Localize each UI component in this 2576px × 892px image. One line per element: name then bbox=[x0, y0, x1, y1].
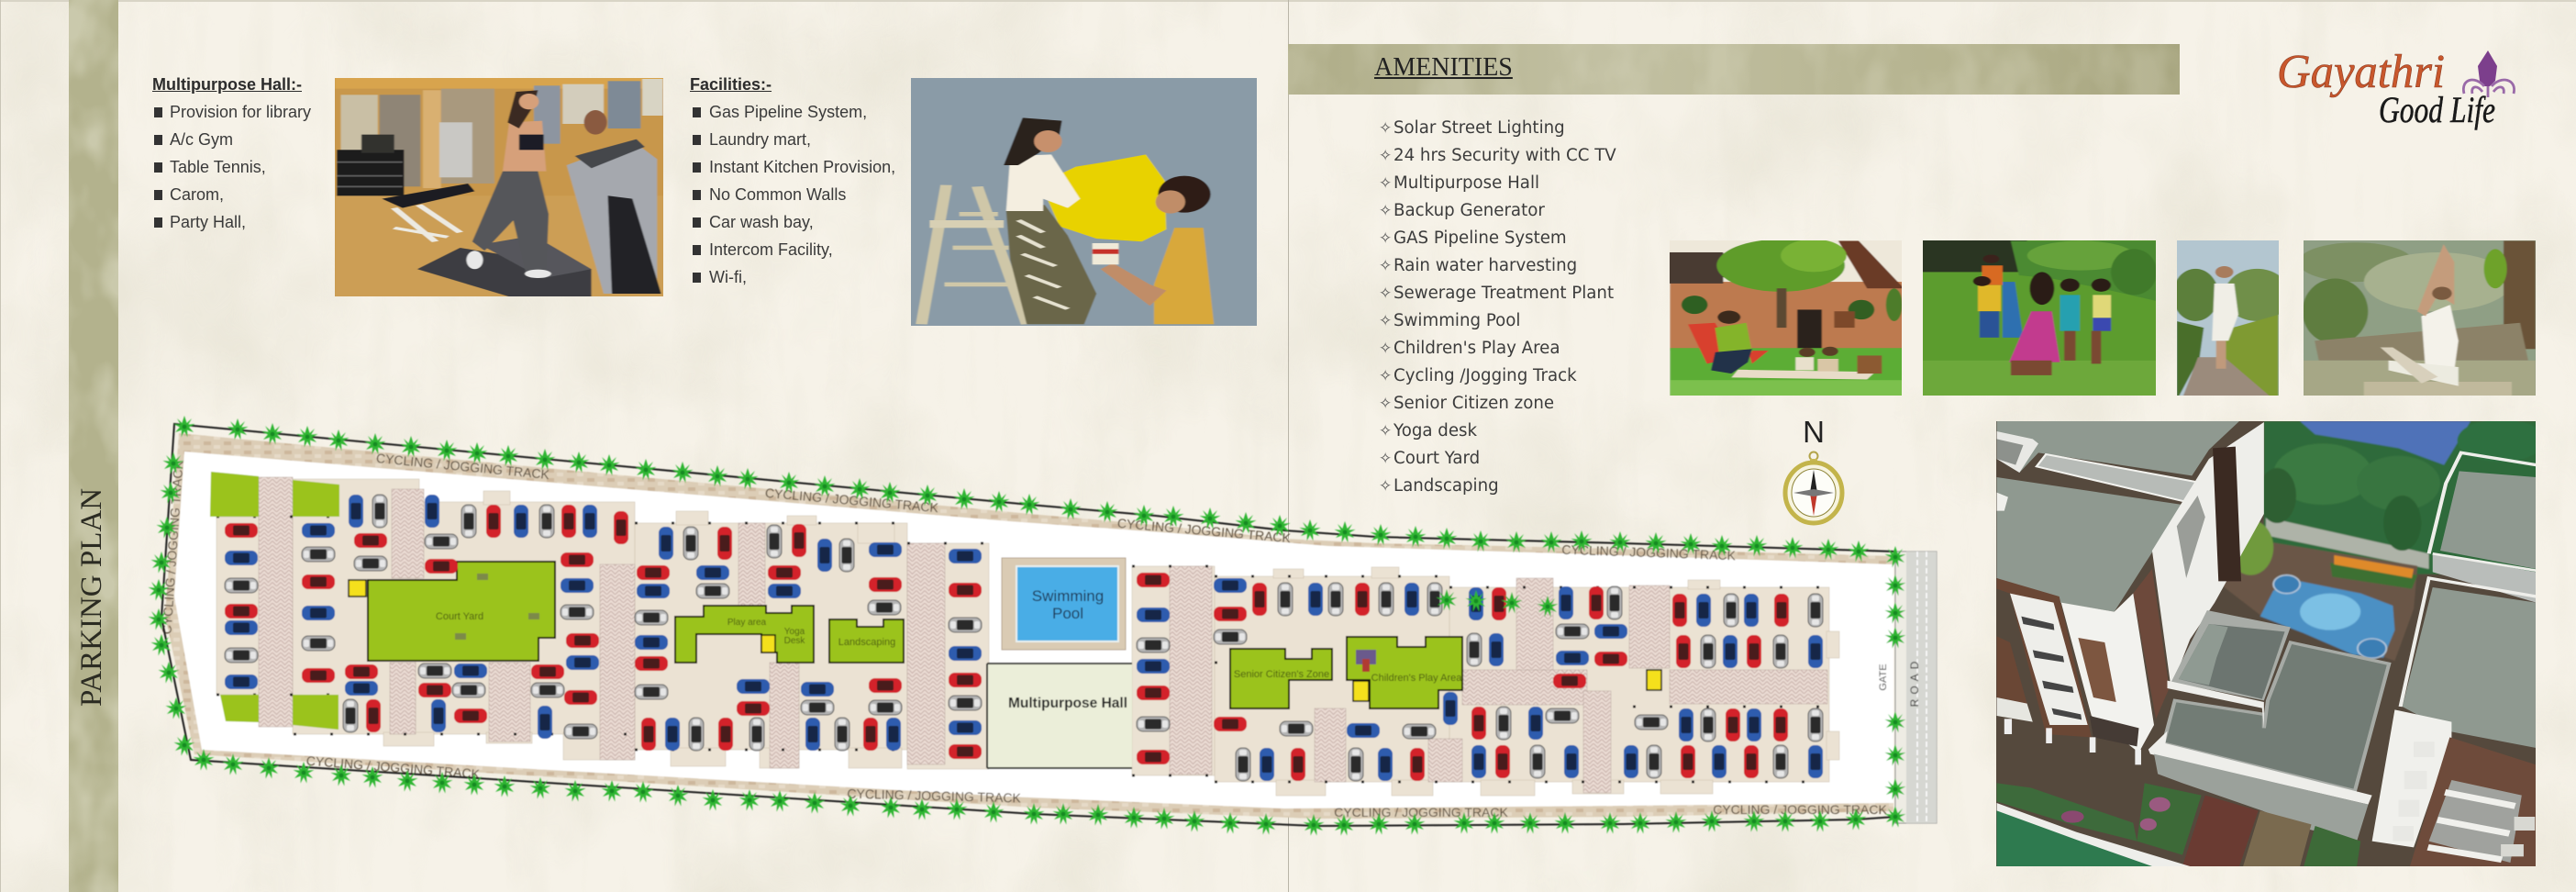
3D aerial render of the buildings and pool bbox=[1996, 421, 2536, 866]
list of amenities: Yoga desk bbox=[1393, 421, 1477, 440]
heading: parking plan: PARKING PLAN bbox=[75, 488, 108, 707]
list of amenities: ✧ bbox=[1379, 147, 1392, 165]
heading: multipurpose hall: Multipurpose Hall:- bbox=[152, 75, 302, 94]
gate label: GATE bbox=[1878, 663, 1889, 691]
olive side strip bbox=[69, 0, 118, 892]
list of facilities: Laundry mart, bbox=[709, 130, 811, 149]
list of facilities: Car wash bay, bbox=[709, 213, 814, 231]
list of facilities: Wi-fi, bbox=[709, 268, 747, 286]
track labels: CYCLING / JOGGING TRACK bbox=[305, 753, 481, 781]
photo: gym with woman on treadmill bbox=[335, 78, 663, 296]
swimming pool: Pool bbox=[1052, 605, 1083, 622]
list of amenities: GAS Pipeline System bbox=[1393, 229, 1567, 248]
list of amenities: ✧ bbox=[1379, 174, 1392, 193]
landscaping: Landscaping bbox=[838, 637, 895, 648]
list of amenities: Senior Citizen zone bbox=[1393, 394, 1554, 413]
track labels: CYCLING / JOGGING TRACK bbox=[1334, 805, 1508, 820]
track labels bbox=[159, 451, 1887, 820]
corner landscape lawns bbox=[210, 472, 339, 730]
jogging track band bbox=[165, 433, 1893, 819]
lift: court yard bbox=[349, 580, 366, 597]
heading: facilities: Facilities:- bbox=[690, 75, 772, 94]
list of amenities: Landscaping bbox=[1393, 476, 1499, 496]
list of amenities: Children's Play Area bbox=[1393, 339, 1560, 358]
list of amenities: ✧ bbox=[1379, 340, 1392, 358]
road and gate bbox=[1878, 552, 1937, 823]
structural pillars bbox=[217, 517, 1829, 782]
list of amenities: ✧ bbox=[1379, 284, 1392, 303]
list of hall features: Provision for library bbox=[170, 103, 311, 121]
panel: multipurpose hall list bbox=[152, 75, 311, 231]
track labels: CYCLING / JOGGING TRACK bbox=[764, 485, 939, 515]
list of amenities: Rain water harvesting bbox=[1393, 256, 1577, 275]
list of amenities: ✧ bbox=[1379, 395, 1392, 413]
title: amenities: AMENITIES bbox=[1374, 53, 1513, 82]
list of amenities: ✧ bbox=[1379, 229, 1392, 248]
play area and yoga desk: Play area bbox=[727, 618, 767, 628]
centre block bbox=[2163, 642, 2389, 791]
multipurpose hall: Multipurpose Hall bbox=[1008, 696, 1127, 711]
photo: woman doing yoga bbox=[2304, 240, 2536, 396]
swimming pool bbox=[1002, 558, 1126, 650]
white site interior bbox=[174, 452, 1893, 808]
list of hall features: Party Hall, bbox=[170, 213, 246, 231]
list of amenities: 24 hrs Security with CC TV bbox=[1393, 146, 1616, 165]
play area and yoga desk bbox=[675, 606, 814, 663]
right block bbox=[2440, 471, 2537, 569]
photo: woman jogging on path bbox=[2177, 240, 2279, 396]
list of amenities: ✧ bbox=[1379, 422, 1392, 440]
list of amenities: Sewerage Treatment Plant bbox=[1393, 284, 1614, 303]
list of amenities: ✧ bbox=[1379, 257, 1392, 275]
list of amenities bbox=[1379, 118, 1616, 496]
list of facilities bbox=[693, 103, 895, 286]
lift: children's area bbox=[1353, 681, 1369, 701]
site plan: parking layout bbox=[148, 415, 1938, 836]
list of amenities: Multipurpose Hall bbox=[1393, 173, 1539, 193]
list of facilities: Intercom Facility, bbox=[709, 240, 833, 259]
logo flower emblem bbox=[2463, 50, 2515, 97]
photo: family picnic on lawn bbox=[1670, 240, 1902, 396]
left block bbox=[1997, 421, 2239, 475]
track labels: CYCLING / JOGGING TRACK bbox=[847, 786, 1022, 805]
north label: N bbox=[1803, 415, 1825, 449]
list of hall features: Table Tennis, bbox=[170, 158, 266, 176]
list of amenities: Cycling /Jogging Track bbox=[1393, 366, 1577, 385]
lift: east block bbox=[1647, 670, 1661, 690]
list of hall features: A/c Gym bbox=[170, 130, 233, 149]
list of amenities: ✧ bbox=[1379, 202, 1392, 220]
parked cars bbox=[225, 495, 1823, 781]
senior citizen's zone bbox=[1230, 649, 1332, 708]
logo wordmark: Gayathri: Gayathri bbox=[2277, 46, 2445, 98]
list of hall features bbox=[154, 103, 311, 231]
road label: ROAD bbox=[1908, 657, 1921, 707]
track labels: CYCLING / JOGGING TRACK bbox=[1713, 802, 1887, 817]
lift: play area bbox=[761, 635, 775, 652]
list of amenities: ✧ bbox=[1379, 119, 1392, 138]
list of amenities: Backup Generator bbox=[1393, 201, 1545, 220]
multipurpose hall bbox=[987, 663, 1132, 768]
play area and yoga desk: Desk bbox=[784, 636, 805, 646]
list of amenities: Swimming Pool bbox=[1393, 311, 1520, 330]
photo: couple painting a wall bbox=[911, 78, 1257, 326]
landscaping bbox=[829, 619, 904, 663]
children's play area bbox=[1347, 637, 1462, 708]
track labels: CYCLING / JOGGING TRACK bbox=[1561, 542, 1737, 563]
boundary trees bbox=[149, 416, 1906, 835]
children's play area: Children's Play Area bbox=[1371, 673, 1462, 684]
list of amenities: Court Yard bbox=[1393, 449, 1480, 468]
icon: compass bbox=[1783, 452, 1844, 525]
list of hall features: Carom, bbox=[170, 185, 224, 204]
track labels: CYCLING / JOGGING TRACK bbox=[1116, 516, 1292, 545]
list of facilities: Gas Pipeline System, bbox=[709, 103, 867, 121]
court yard bbox=[368, 562, 555, 661]
list of facilities: Instant Kitchen Provision, bbox=[709, 158, 895, 176]
photo: children playing on the lawn bbox=[1923, 240, 2156, 396]
track labels: CYCLING / JOGGING TRACK bbox=[159, 460, 186, 635]
list of amenities: ✧ bbox=[1379, 312, 1392, 330]
garden bbox=[1997, 783, 2137, 842]
panel: facilities list bbox=[690, 75, 895, 286]
senior citizen's zone: Senior Citizen's Zone bbox=[1234, 669, 1329, 680]
play area and yoga desk: Yoga bbox=[784, 627, 805, 637]
track labels: CYCLING / JOGGING TRACK bbox=[375, 451, 550, 482]
parking ground bbox=[217, 479, 1839, 796]
list of amenities: ✧ bbox=[1379, 477, 1392, 496]
list of amenities: Solar Street Lighting bbox=[1393, 118, 1565, 138]
list of amenities: ✧ bbox=[1379, 367, 1392, 385]
brick pedestrian paths bbox=[259, 477, 1827, 793]
court yard: Court Yard bbox=[436, 611, 483, 622]
boundary fence bbox=[161, 424, 1895, 826]
list of amenities: ✧ bbox=[1379, 450, 1392, 468]
logo: Gayathri Good Life bbox=[2277, 46, 2515, 130]
heading band: amenities bbox=[1288, 44, 2180, 95]
list of facilities: No Common Walls bbox=[709, 185, 846, 204]
swimming pool: Swimming bbox=[1032, 587, 1104, 605]
